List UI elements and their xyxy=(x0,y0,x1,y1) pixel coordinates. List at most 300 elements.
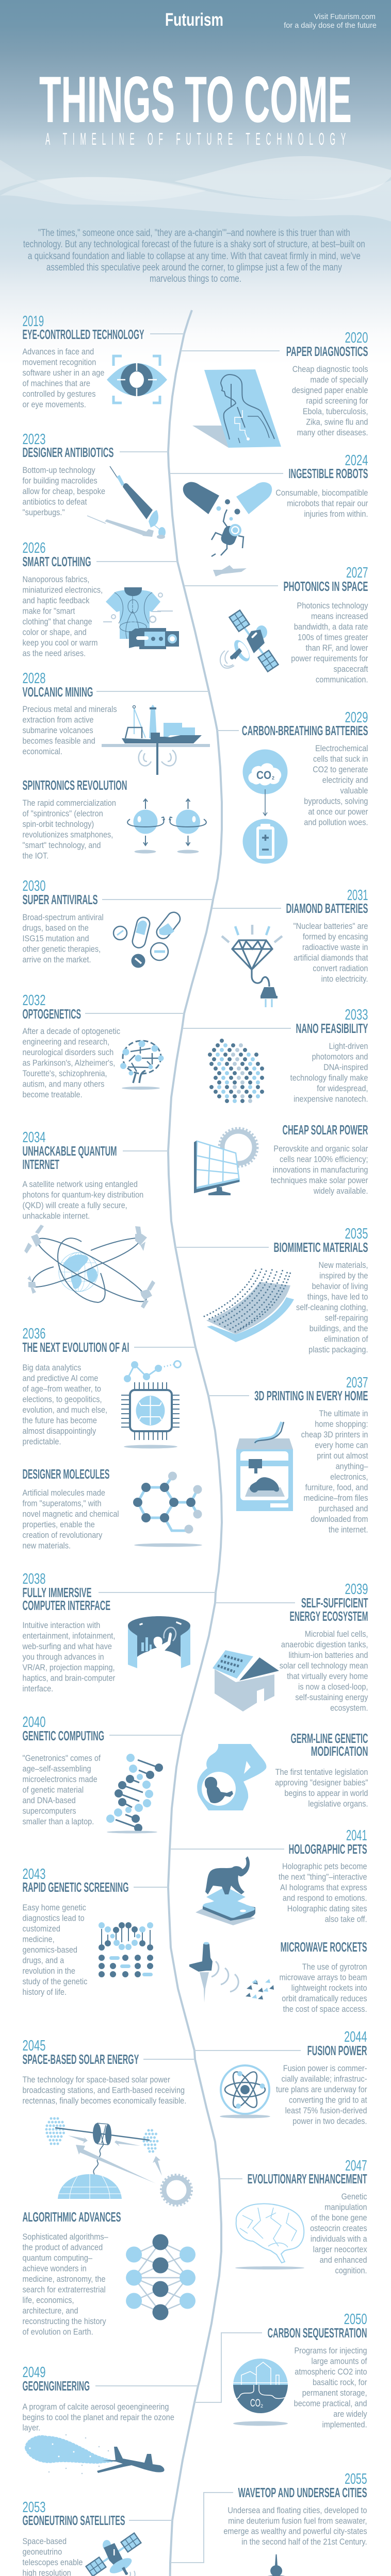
description: The first tentative legislation xyxy=(275,1768,368,1777)
description: the future has become xyxy=(23,1416,97,1426)
description: The ultimate in xyxy=(319,1409,368,1418)
description: cheap 3D printers in xyxy=(301,1430,368,1439)
icon: 3D printer xyxy=(236,1422,293,1511)
heading: THE NEXT EVOLUTION OF AI xyxy=(23,1341,129,1355)
description: power in two decades. xyxy=(292,2117,367,2126)
heading: COMPUTER INTERFACE xyxy=(23,1599,110,1613)
description: evolution, and much else, xyxy=(23,1405,107,1415)
description: the internet. xyxy=(329,1526,368,1535)
description: novel magnetic and chemical xyxy=(23,1510,119,1519)
description: Genetic xyxy=(341,2192,367,2201)
year: 2033 xyxy=(345,1007,368,1023)
icon: solar panel and sun xyxy=(194,1128,257,1195)
description: ture plans are underway for xyxy=(276,2085,367,2094)
description: Light-driven xyxy=(329,1042,368,1051)
entry: 2031 diamond batteries xyxy=(222,887,368,1007)
icon: neural network xyxy=(126,2234,196,2320)
icon: syringes xyxy=(87,466,166,539)
description: search for extraterrestrial xyxy=(23,2285,106,2295)
description: Fusion power is commer- xyxy=(283,2064,367,2073)
entry: germ-line genetic modification xyxy=(197,1732,368,1810)
description: techniques make solar power xyxy=(271,1176,368,1185)
description: customized xyxy=(23,1924,60,1934)
description: as Parkinson's, Alzheimer's, xyxy=(23,1059,115,1068)
description: Sophisticated algorithms– xyxy=(23,2232,108,2242)
description: communication. xyxy=(316,675,368,685)
description: electricity and xyxy=(322,776,368,785)
description: every home can xyxy=(315,1441,368,1450)
description: diagnostics lead to xyxy=(23,1914,85,1923)
description: software usher in an age xyxy=(23,368,104,378)
year: 2032 xyxy=(23,992,45,1009)
description: means increased xyxy=(311,612,368,621)
entry: 2033 nano feasibility xyxy=(210,1007,368,1104)
description: photons for quantum-key distribution xyxy=(23,1191,143,1200)
description: electronics, xyxy=(330,1472,368,1482)
year: 2050 xyxy=(344,2311,367,2328)
description: medicine, astronomy, the xyxy=(23,2275,106,2284)
description: cognition. xyxy=(335,2266,367,2276)
year: 2040 xyxy=(23,1714,45,1731)
description: cells near 100% efficiency; xyxy=(280,1155,368,1164)
entry: 2040 genetic computing xyxy=(23,1714,163,1833)
description: home shopping: xyxy=(315,1420,368,1429)
description: ISG15 mutation and xyxy=(23,934,89,943)
description: converting the grid to at xyxy=(289,2096,367,2105)
description: designed paper enable xyxy=(292,386,368,395)
description: other genetic therapies, xyxy=(23,945,101,954)
timeline spine xyxy=(168,310,222,2576)
description: emerge as wealthy and powerful city-states xyxy=(223,2527,367,2536)
entry: 2029 carbon-breathing batteries xyxy=(242,709,368,863)
description: revolutionizes smatphones, xyxy=(23,831,113,840)
description: spacecraft xyxy=(334,665,368,674)
description: of the bone gene xyxy=(311,2213,367,2223)
description: Bottom-up technology xyxy=(23,466,95,475)
icon: solar power station and earth xyxy=(46,2119,191,2205)
entry: 2049 geoengineering xyxy=(23,2364,174,2474)
description: Precious metal and minerals xyxy=(23,705,117,714)
description: bandwidth, a data rate xyxy=(294,622,368,632)
description: DNA-inspired xyxy=(323,1063,368,1072)
description: of evolution on Earth. xyxy=(23,2328,93,2337)
description: microwave arrays to beam xyxy=(279,1973,367,1982)
description: is now a closed-loop, xyxy=(298,1683,368,1692)
description: of age–from weather, to xyxy=(23,1384,101,1394)
description: photomotors and xyxy=(312,1053,368,1062)
icon: immersive cylinder xyxy=(128,1616,190,1668)
description: "Genetronics" comes of xyxy=(23,1754,101,1763)
description: self-repairing xyxy=(325,1314,368,1323)
description: color or shape, and xyxy=(23,628,87,637)
heading: UNHACKABLE QUANTUM xyxy=(23,1144,117,1159)
entry: 2034 unhackable quantum internet xyxy=(23,1129,155,1310)
heading: SPACE-BASED SOLAR ENERGY xyxy=(23,2053,139,2067)
description: unhackable internet. xyxy=(23,1212,90,1221)
entry: 2023 designer antibiotics xyxy=(23,431,166,539)
year: 2026 xyxy=(23,540,45,556)
heading: DESIGNER ANTIBIOTICS xyxy=(23,446,113,460)
description: miniaturized electronics, xyxy=(23,586,103,595)
description: artificial diamonds that xyxy=(294,954,368,963)
description: layer. xyxy=(23,2424,40,2433)
description: revolution in the xyxy=(23,1967,75,1976)
year: 2031 xyxy=(347,887,368,904)
connector lines xyxy=(85,334,301,2563)
description: telescopes enable xyxy=(23,2558,83,2567)
description: antibiotics to defeat xyxy=(23,498,87,507)
description: basaltic rock, for xyxy=(313,2378,367,2387)
description: and DNA-based xyxy=(23,1796,76,1805)
description: Intuitive interaction with xyxy=(23,1621,100,1630)
entry: 2045 space-based solar energy xyxy=(23,2038,191,2205)
entry: 2044 fusion power xyxy=(220,2029,367,2126)
description: properties, enable the xyxy=(23,1520,95,1530)
year: 2053 xyxy=(23,2499,45,2516)
description: smaller than a laptop. xyxy=(23,1817,94,1826)
description: The rapid commercialization xyxy=(23,799,116,808)
description: as the need arises. xyxy=(23,649,86,658)
description: Easy home genetic xyxy=(23,1903,86,1912)
description: ecosystem. xyxy=(330,1704,368,1713)
description: things, have led to xyxy=(307,1293,368,1302)
heading: OPTOGENETICS xyxy=(23,1007,81,1022)
description: anaerobic digestion tanks, xyxy=(281,1640,368,1650)
description: solar cell technology mean xyxy=(280,1662,368,1671)
description: autism, and many others xyxy=(23,1080,105,1089)
description: The technology for space-based solar power xyxy=(23,2075,170,2084)
description: and predictive AI come xyxy=(23,1374,98,1383)
icon: drilling ship xyxy=(102,705,210,775)
year: 2041 xyxy=(346,1827,367,1844)
icon: atom in ring xyxy=(220,2065,270,2119)
entry: 2027 photonics in space xyxy=(220,565,368,685)
intro text: marvelous things to come. xyxy=(150,274,241,284)
description: (QKD) will create a fully secure, xyxy=(23,1201,127,1210)
description: CO2 to generate xyxy=(313,765,368,774)
description: become treatable. xyxy=(23,1090,83,1099)
heading: RAPID GENETIC SCREENING xyxy=(23,1880,129,1895)
icon: microwave rocket xyxy=(189,1942,274,2003)
description: larger neocortex xyxy=(313,2245,367,2255)
entry: 2032 optogenetics xyxy=(23,992,164,1099)
description: radioactive waste in xyxy=(302,943,368,952)
icon: plane spreading aerosol xyxy=(26,2434,165,2474)
entry: algorithmic advances xyxy=(23,2210,196,2337)
entry: 2024 ingestible robots xyxy=(183,452,368,577)
description: orbit dramatically reduces xyxy=(282,1994,367,2004)
icon: CO2 to battery: CO xyxy=(256,769,271,782)
description: convert radiation xyxy=(313,964,368,973)
heading: VOLCANIC MINING xyxy=(23,685,93,700)
year: 2035 xyxy=(345,1226,368,1242)
description: becomes feasible and xyxy=(23,737,95,746)
description: extraction from active xyxy=(23,716,93,725)
year: 2045 xyxy=(23,2038,45,2054)
description: than RF, and lower xyxy=(306,643,368,653)
description: buildings, and the xyxy=(309,1324,368,1333)
icon: holographic elephant on phone xyxy=(196,1856,255,1925)
entry: 2019 eye-controlled technology xyxy=(23,313,167,410)
visit link: for a daily dose of the future xyxy=(284,22,377,30)
entry: microwave rockets xyxy=(189,1940,367,2014)
description: AI holograms that express xyxy=(280,1883,367,1892)
description: drugs, based on the xyxy=(23,924,89,933)
year: 2029 xyxy=(345,709,368,726)
entry: 2047 evolutionary enhancement xyxy=(235,2158,367,2276)
icon: solar house xyxy=(213,1650,279,1711)
description: osteocrin creates xyxy=(310,2224,367,2233)
description: history of life. xyxy=(23,1988,67,1997)
icon: satellite over earth xyxy=(85,2532,157,2576)
icon: molecule xyxy=(133,1471,202,1547)
description: atmospheric CO2 into xyxy=(295,2367,367,2377)
description: you through advances in xyxy=(23,1653,104,1662)
description: spin-orbit technology) xyxy=(23,820,94,829)
description: individuals with a xyxy=(311,2234,367,2244)
entry: 2038 fully immersive computer interface xyxy=(22,1571,190,1693)
description: Advances in face and xyxy=(23,347,94,357)
description: self-cleaning clothing, xyxy=(296,1303,368,1312)
description: least 75% fusion-derived xyxy=(285,2106,367,2115)
icon: capsule and microbot xyxy=(183,482,272,577)
entry: 2037 3D printing in every home xyxy=(236,1375,368,1535)
description: innovations in manufacturing xyxy=(273,1165,368,1175)
heading: EYE-CONTROLLED TECHNOLOGY xyxy=(23,328,144,342)
description: become practical, and xyxy=(294,2399,367,2409)
description: valuable xyxy=(340,786,368,795)
icon: layered material xyxy=(204,1267,294,1342)
entry: 2020 paper diagnostics xyxy=(192,330,368,448)
description: Big data analytics xyxy=(23,1363,81,1372)
heading: SUPER ANTIVIRALS xyxy=(23,893,98,907)
description: large amounts of xyxy=(312,2357,367,2366)
description: New materials, xyxy=(319,1261,368,1270)
description: manipulation xyxy=(324,2203,367,2212)
description: Undersea and floating cities, developed to xyxy=(227,2506,367,2515)
icon: nano dot cluster xyxy=(210,1041,267,1101)
description: at once our power xyxy=(308,807,368,817)
description: entertainment, infotainment, xyxy=(23,1632,115,1641)
description: predictable. xyxy=(23,1437,61,1447)
description: for building macrolides xyxy=(23,477,97,486)
description: Programs for injecting xyxy=(294,2346,367,2355)
description: achieve wonders in xyxy=(23,2264,87,2274)
description: reconstructing the history xyxy=(23,2317,106,2326)
description: Cheap diagnostic tools xyxy=(292,365,368,374)
description: approving "designer babies" xyxy=(275,1778,368,1788)
description: study of the genetic xyxy=(23,1977,88,1987)
description: furniture, food, and xyxy=(305,1483,368,1493)
description: behavior of living xyxy=(312,1282,368,1291)
description: and haptic feedback xyxy=(23,596,90,605)
description: haptics, and brain-computer xyxy=(23,1674,115,1683)
description: and pollution woes. xyxy=(304,818,368,827)
icon: AI chip xyxy=(121,1361,181,1449)
year: 2024 xyxy=(345,452,368,469)
description: injuries from within. xyxy=(304,510,368,519)
entry: 2028 volcanic mining xyxy=(23,670,210,775)
icon: neural tree xyxy=(120,1041,164,1090)
description: self-sustaining energy xyxy=(295,1693,368,1702)
icon: earth with orbiting satellites xyxy=(24,1225,155,1310)
description: new materials. xyxy=(23,1541,71,1551)
description: legislative organs. xyxy=(308,1800,368,1809)
description: anything– xyxy=(336,1462,368,1471)
entry: spintronics revolution xyxy=(23,778,206,861)
description: economical. xyxy=(23,747,62,756)
description: Holographic pets become xyxy=(282,1862,367,1871)
description: Ebola, tuberculosis, xyxy=(303,407,368,416)
heading: GEONEUTRINO SATELLITES xyxy=(23,2514,125,2528)
icon: paper test with human figure xyxy=(192,369,281,448)
description: purchased and xyxy=(318,1504,368,1514)
icon: brain xyxy=(235,2204,304,2269)
entry: 2041 holographic pets xyxy=(196,1827,367,1925)
year: 2047 xyxy=(345,2158,367,2174)
entry: 2035 biomimetic materials xyxy=(204,1226,368,1354)
description: elections, to geopolitics, xyxy=(23,1395,102,1404)
description: permanent storage, xyxy=(302,2388,367,2398)
description: inspired by the xyxy=(319,1272,368,1281)
heading: GENETIC COMPUTING xyxy=(23,1729,104,1743)
description: age–self-assembling xyxy=(23,1765,91,1774)
description: and enhanced xyxy=(320,2256,367,2265)
year: 2028 xyxy=(23,670,45,687)
description: of machines that are xyxy=(23,379,90,388)
description: the product of advanced xyxy=(23,2243,103,2252)
description: genomics-based xyxy=(23,1945,77,1955)
description: implemented. xyxy=(322,2420,367,2430)
description: supercomputers xyxy=(23,1807,76,1816)
description: make for "smart xyxy=(23,607,75,616)
description: lithium-ion batteries and xyxy=(288,1651,368,1660)
description: Consumable, biocompatible xyxy=(275,488,368,498)
icon: carbon storage sphere: CO xyxy=(250,2397,260,2409)
description: or eye movements. xyxy=(23,400,86,410)
entry: 2053 geoneutrino satellites xyxy=(23,2499,157,2576)
description: A program of calcite aerosol geoengineering xyxy=(23,2402,169,2412)
entry: 2039 self-sufficient energy ecosystem xyxy=(213,1581,368,1713)
description: medicine–from files xyxy=(303,1494,368,1503)
description: Photonics technology xyxy=(297,601,368,611)
heading: GEOENGINEERING xyxy=(23,2379,90,2394)
description: Artificial molecules made xyxy=(23,1488,105,1498)
description: movement recognition xyxy=(23,358,96,367)
year: 2043 xyxy=(23,1866,45,1883)
entry: 2055 wavetop and undersea cities xyxy=(191,2471,367,2576)
year: 2039 xyxy=(345,1581,368,1598)
description: "Nuclear batteries" are xyxy=(293,922,368,931)
description: interface. xyxy=(23,1684,53,1693)
year: 2019 xyxy=(23,313,44,330)
description: "superbugs." xyxy=(23,508,65,517)
icon: smart shirt and belt xyxy=(103,587,179,649)
logo: Futurism: Futurism xyxy=(165,10,223,30)
icon: pregnant silhouette and fetus xyxy=(197,1744,266,1810)
description: drugs, and a xyxy=(23,1956,64,1965)
description: cells that suck in xyxy=(313,755,368,764)
description: keep you cool or warm xyxy=(23,638,97,648)
year: 2038 xyxy=(23,1571,45,1587)
description: architecture, and xyxy=(23,2307,78,2316)
description: A satellite network using entangled xyxy=(23,1180,138,1189)
description: The use of gyrotron xyxy=(302,1962,367,1972)
description: almost disappointingly xyxy=(23,1427,96,1436)
entry: 2043 rapid genetic screening xyxy=(23,1866,153,1997)
description: plastic packaging. xyxy=(308,1345,368,1354)
year: 2055 xyxy=(345,2471,367,2487)
description: widely available. xyxy=(313,1187,368,1196)
header xyxy=(23,10,377,284)
description: technology finally make xyxy=(290,1074,368,1083)
description: of genetic material xyxy=(23,1786,84,1795)
description: inexpensive nanotech. xyxy=(294,1095,368,1104)
description: many other diseases. xyxy=(297,428,368,437)
heading: DESIGNER MOLECULES xyxy=(23,1467,109,1482)
description: Microbial fuel cells, xyxy=(305,1630,368,1639)
description: "smart" technology, and xyxy=(23,841,101,850)
year: 2023 xyxy=(23,431,45,448)
description: mine deuterium fusion fuel from seawater, xyxy=(228,2516,367,2526)
icon: pills xyxy=(113,910,183,968)
description: submarine volcanoes xyxy=(23,726,93,735)
description: print out almost xyxy=(317,1451,368,1461)
entry: designer molecules xyxy=(23,1467,202,1551)
description: byproducts, solving xyxy=(304,797,368,806)
description: cially available; infrastruc- xyxy=(281,2075,367,2084)
description: into electricity. xyxy=(321,975,368,984)
description: lightweight rockets into xyxy=(291,1984,367,1993)
description: in the second half of the 21st Century. xyxy=(241,2537,367,2547)
entry: 2030 super antivirals xyxy=(23,878,183,968)
description: rapid screening for xyxy=(306,397,368,406)
description: and respond to emotions. xyxy=(283,1894,367,1903)
icon: diamond with plug xyxy=(222,925,282,1007)
description: elimination of xyxy=(324,1335,368,1344)
description: geoneutrino xyxy=(23,2548,62,2557)
description: from "superatoms," with xyxy=(23,1499,102,1509)
description: life, economics, xyxy=(23,2296,74,2305)
heading: ALGORITHMIC ADVANCES xyxy=(23,2210,121,2225)
description: the cost of space access. xyxy=(283,2005,367,2014)
description: clothing" that change xyxy=(23,617,92,626)
description: web-surfing and what have xyxy=(22,1642,112,1651)
entry: 2050 carbon sequestration xyxy=(233,2311,367,2430)
description: made of specially xyxy=(310,376,368,385)
description: microbots that repair our xyxy=(287,499,368,509)
description: quantum computing– xyxy=(23,2253,92,2263)
visit link: Visit Futurism.com xyxy=(314,13,376,21)
icon: domed city xyxy=(191,2554,363,2576)
subtitle: A TIMELINE OF FUTURE TECHNOLOGY xyxy=(45,130,346,149)
heading: FULLY IMMERSIVE xyxy=(23,1586,92,1600)
entry: 2026 smart clothing xyxy=(23,540,179,658)
description: rectennas, finally becomes economically feasible. xyxy=(23,2096,186,2106)
icon: CO2 to battery xyxy=(242,749,288,863)
heading: SMART CLOTHING xyxy=(23,555,91,569)
description: formed by encasing xyxy=(303,933,368,942)
description: microelectronics made xyxy=(23,1775,97,1784)
icon: DNA helix xyxy=(106,1754,163,1833)
year: 2034 xyxy=(23,1129,45,1146)
description: Perovskite and organic solar xyxy=(273,1144,368,1154)
year: 2020 xyxy=(345,330,368,346)
description: of "spintronics" (electron xyxy=(23,809,103,819)
description: for widespread, xyxy=(317,1084,368,1093)
description: the IOT. xyxy=(23,852,48,861)
description: controlled by gestures xyxy=(23,389,96,399)
